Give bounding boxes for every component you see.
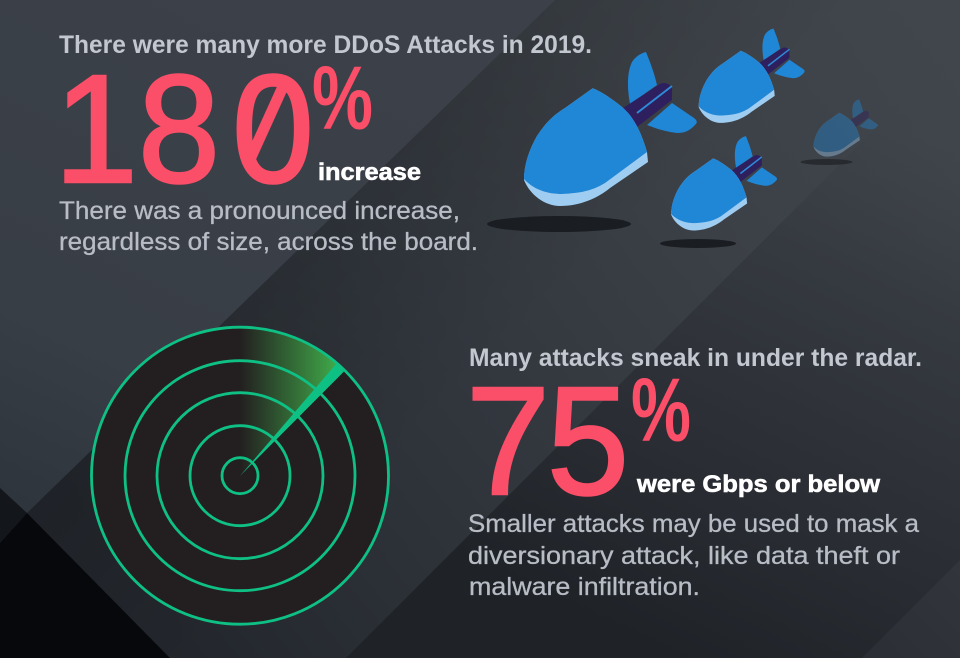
big number: 180 percent: 8 [138, 43, 220, 215]
bomb medium upper [699, 28, 805, 123]
big number: 75 percent: % [631, 361, 691, 461]
heading: DDoS attacks: There were many more DDoS Attacks in 2019. [59, 31, 592, 59]
body text: smaller attacks [468, 510, 919, 601]
body text: pronounced increase: regardless of size, across the board. [59, 228, 478, 256]
body text: smaller attacks: Smaller attacks may be used to mask a [468, 510, 919, 538]
radar rings [92, 327, 388, 624]
body text: smaller attacks: malware infiltration. [469, 573, 700, 601]
bomb medium lower [671, 136, 777, 230]
icon: falling bombs [487, 28, 878, 248]
label: increase: increase [318, 159, 421, 186]
body text: pronounced increase [59, 197, 478, 256]
big number: 75 percent: 5 [547, 355, 629, 527]
label: were Gbps or below: were Gbps or below [636, 471, 880, 498]
bomb small faded [814, 99, 878, 157]
body text: pronounced increase: There was a pronounced increase, [59, 197, 460, 225]
big number: 75 percent: 7 [466, 355, 550, 527]
big number: 180 percent: 1 [54, 43, 138, 215]
bomb shadow medium [660, 239, 736, 248]
icon: radar [91, 327, 389, 625]
big number: 75 percent [466, 355, 691, 527]
bomb shadow small [800, 159, 852, 165]
radar disc [91, 327, 389, 625]
big number: 180 percent [54, 43, 373, 215]
bomb large [524, 52, 697, 206]
radar needle [240, 364, 344, 476]
big number: 180 percent: % [312, 49, 373, 149]
big number: 180 percent: 0 [232, 43, 314, 215]
bomb shadow large [487, 216, 631, 232]
body text: smaller attacks: diversionary attack, like data theft or [468, 542, 900, 570]
radar sweep [240, 327, 340, 476]
heading: under the radar: Many attacks sneak in under the radar. [469, 344, 922, 372]
